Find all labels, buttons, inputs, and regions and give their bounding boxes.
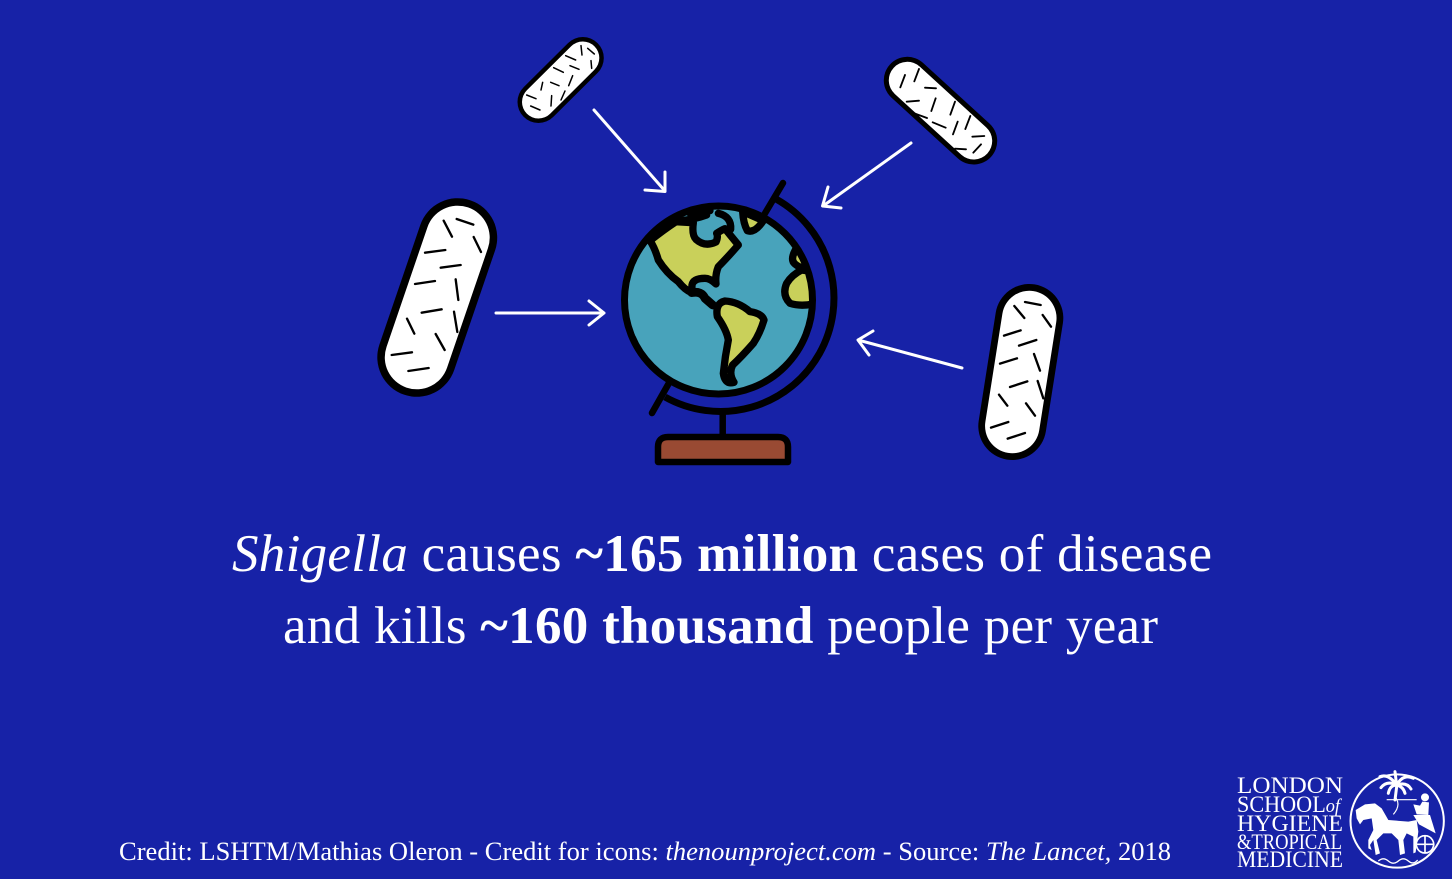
logo wordmark: &TROPICAL — [1237, 829, 1342, 854]
North America — [650, 222, 738, 293]
globe ocean — [624, 206, 812, 394]
icon: bacterium left — [392, 219, 481, 371]
arrow: left to globe — [496, 301, 604, 325]
arrow: top left to globe — [594, 110, 665, 192]
logo wordmark: HYGIENE — [1237, 811, 1343, 836]
Greenland — [743, 212, 763, 231]
water waves — [1378, 859, 1418, 863]
arrow: right to globe — [858, 331, 962, 368]
headline — [232, 525, 1212, 655]
credit line: Credit: LSHTM/Mathias Oleron - Credit for icons: thenounproject.com - Source: The Lancet, 2018 — [119, 836, 1171, 866]
icon: bacterium right — [991, 302, 1051, 439]
globe meridian arc — [665, 199, 834, 411]
Central America — [692, 292, 713, 305]
Europe — [788, 248, 802, 269]
horse — [1356, 803, 1418, 855]
globe stand — [719, 412, 726, 436]
headline line 1: Shigella causes ~165 million cases of disease — [232, 525, 1212, 583]
chariot wheel — [1416, 836, 1434, 853]
icon: bacterium top right — [900, 69, 984, 153]
continents — [650, 211, 813, 383]
Africa — [785, 270, 813, 305]
globe axis — [652, 183, 783, 413]
icon: globe — [624, 183, 834, 462]
bow and arrow — [1387, 797, 1417, 814]
logo wordmark: MEDICINE — [1237, 847, 1343, 872]
chariot — [1413, 815, 1436, 833]
palm tree — [1380, 772, 1413, 800]
South America — [717, 301, 764, 383]
logo: LSHTM — [1237, 772, 1444, 872]
logo wordmark: SCHOOLof — [1237, 792, 1343, 817]
arrow: top right to globe — [822, 143, 911, 208]
globe base — [658, 437, 788, 462]
headline line 2: and kills ~160 thousand people per year — [283, 597, 1158, 655]
logo seal — [1350, 772, 1444, 868]
archer — [1421, 793, 1429, 801]
logo wordmark — [1237, 773, 1343, 872]
icon: bacterium top left — [527, 46, 594, 110]
Arctic coast — [678, 211, 731, 229]
globe outline — [624, 206, 812, 394]
logo wordmark: LONDON — [1237, 773, 1343, 798]
